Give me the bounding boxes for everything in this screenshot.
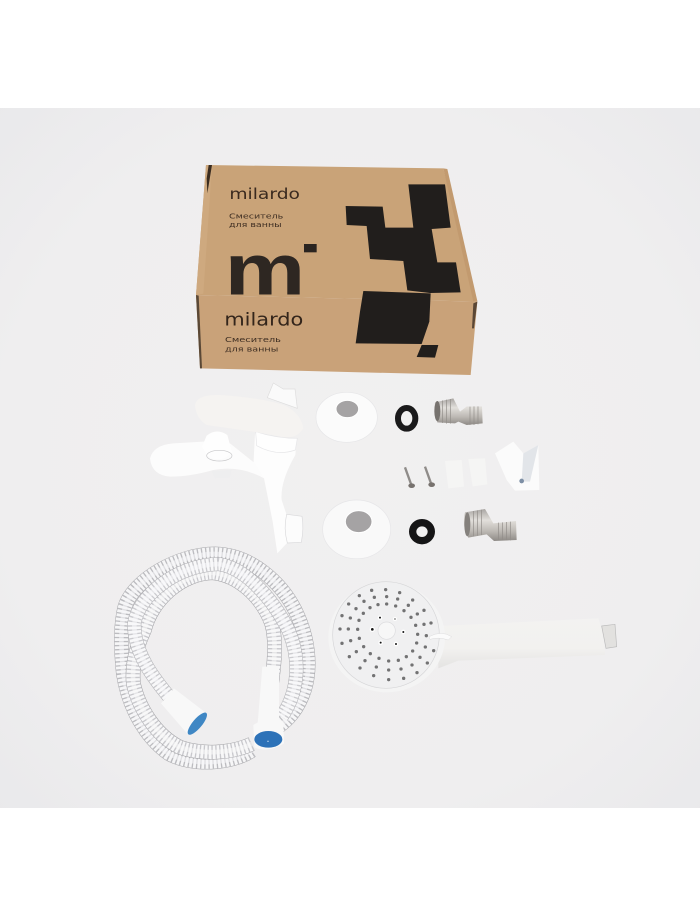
lower steel fitting [464,509,517,541]
hose connector and blue end [253,667,284,750]
upper rubber ring [398,408,415,429]
wall plug left [445,460,464,488]
shower threaded end [602,624,617,648]
upper flange [316,392,377,442]
center button [378,622,395,639]
outer coil [121,554,308,762]
hose [121,554,308,762]
inner coil [133,573,275,752]
black pattern on front [356,291,431,344]
shower handle [438,618,605,668]
box front face [196,295,477,375]
brand name top: milardo [229,185,300,203]
faucet lever [195,395,303,437]
faucet collar [256,432,297,453]
big logo letter: m [225,231,305,311]
box top face [196,165,477,302]
wall plug right [468,458,487,486]
hardware parts [150,383,539,559]
product name front line 2: для ванны [225,344,279,353]
hose sleeve and blue end [161,688,210,737]
faucet diverter knob [202,431,232,459]
faucet spout [150,442,264,478]
black pattern on top [346,184,461,293]
cardboard box [196,165,477,375]
screw left [405,467,415,488]
upper steel fitting [434,398,483,425]
middle coil [134,564,296,717]
product name front: Смеситель [225,335,281,344]
faucet valve stem [212,470,232,478]
photo background [0,108,700,808]
spray switch [429,633,452,640]
brand name front: milardo [224,310,303,330]
hand shower [328,582,617,692]
big logo dot [304,244,317,252]
nozzle holes [338,588,435,681]
faucet lever tab [267,383,297,408]
lower flange [323,500,391,559]
faucet connector [285,514,303,543]
faucet body [253,433,297,553]
lower rubber ring [413,523,431,541]
product name top line 2: для ванны [229,221,282,229]
shower head [328,582,445,692]
faucet [150,383,303,553]
center jets [370,616,405,646]
screw right [425,467,435,487]
product name top: Смеситель [229,213,283,221]
shower hose and hand shower [121,554,617,762]
black small square [417,345,438,358]
hand shower holder [495,442,539,491]
